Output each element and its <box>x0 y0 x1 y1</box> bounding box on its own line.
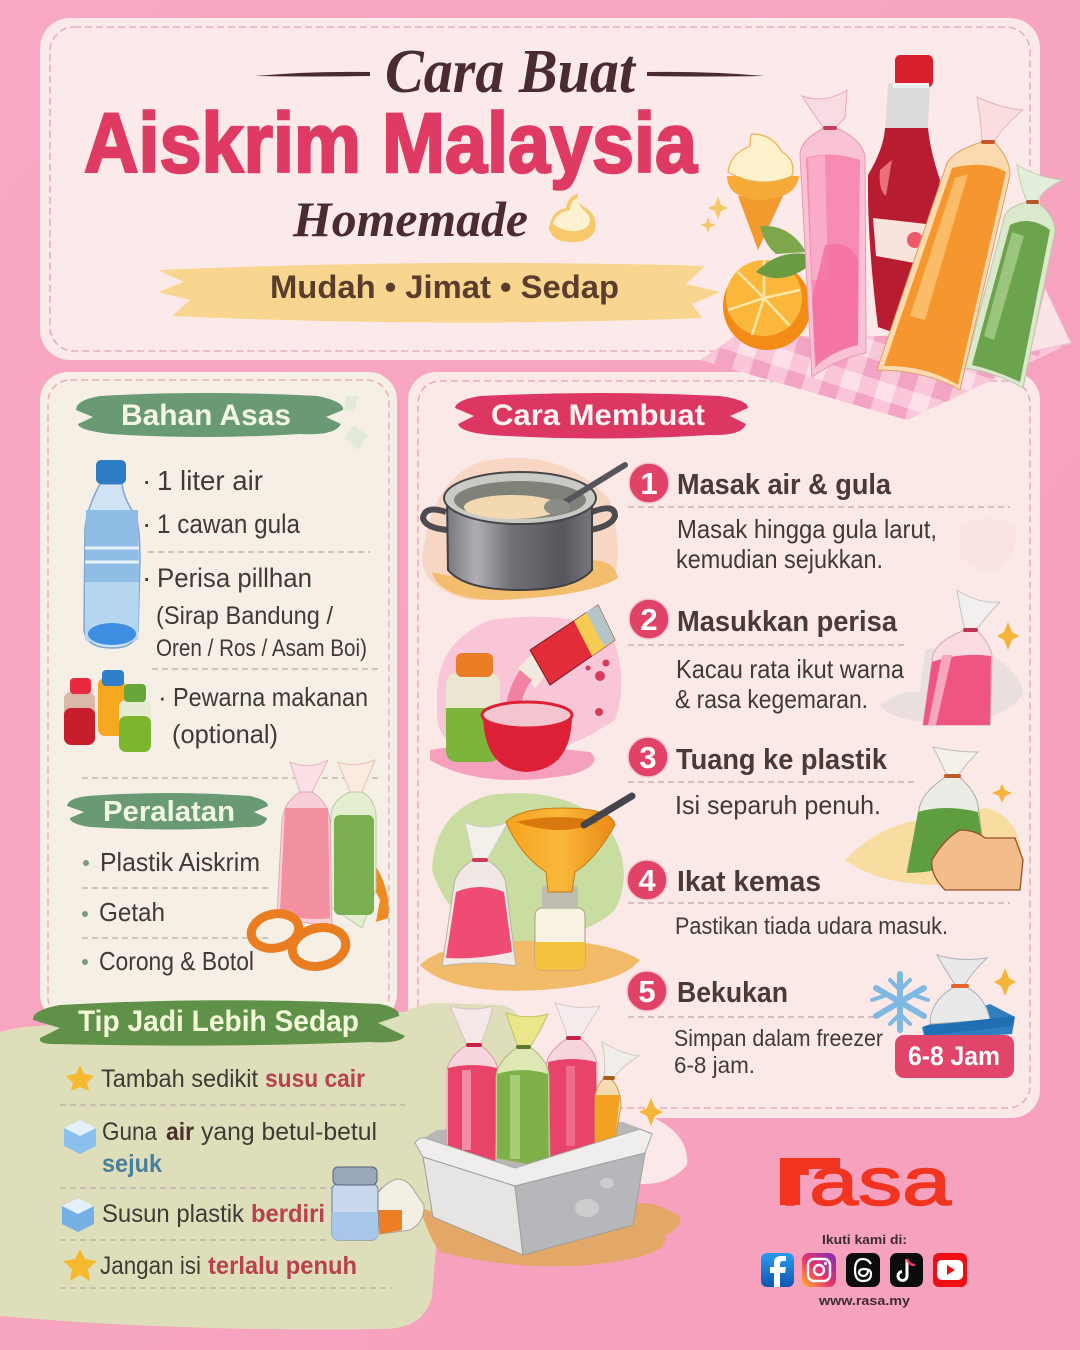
list: bahan asas ingredients: Perisa pillhan <box>157 563 312 593</box>
illustration: tray of ice pops <box>415 1003 687 1266</box>
icon: threads <box>846 1253 880 1287</box>
orange bag <box>877 97 1023 390</box>
illustration: bag funnel bottle <box>420 793 640 991</box>
icon: instagram <box>802 1253 836 1287</box>
step 1: Masak air & gula <box>677 469 892 501</box>
orange bag <box>595 1042 639 1146</box>
list: peralatan: Getah <box>99 897 165 927</box>
pink bag 2 <box>546 1003 600 1160</box>
title: cara buat: Cara Buat <box>385 38 637 106</box>
icon: food colouring bottles <box>64 670 151 752</box>
list: bahan asas ingredients: (optional) <box>172 719 278 749</box>
illustration: cooking pot <box>422 458 625 600</box>
icon: water bottle <box>84 460 140 648</box>
logo: rasa: rasa <box>780 1144 951 1220</box>
step 5: 5 <box>638 974 656 1009</box>
cloth flap <box>1030 288 1071 352</box>
icon: sparkles <box>700 197 728 233</box>
heading: cara membuat: Cara Membuat <box>491 399 705 432</box>
icon: youtube <box>933 1253 967 1287</box>
text: follow us: Ikuti kami di: <box>822 1232 907 1247</box>
ice cream cone <box>727 134 799 250</box>
step 5 <box>627 971 883 1078</box>
tip 2: sejuk <box>102 1150 162 1178</box>
tablecloth <box>700 336 1071 420</box>
tip 3 <box>60 1198 330 1240</box>
icon: facebook <box>761 1253 794 1287</box>
green bag <box>496 1013 550 1168</box>
list: bahan asas ingredients: · <box>142 465 151 496</box>
banner: mudah jimat sedap: Mudah • Jimat • Sedap <box>270 269 619 305</box>
tip 3: berdiri <box>251 1200 325 1228</box>
orange fruit <box>723 226 811 350</box>
step 3: 3 <box>639 740 657 775</box>
list: bahan asas ingredients: · <box>142 508 151 539</box>
list: bahan asas ingredients: · <box>142 562 151 593</box>
list: bahan asas ingredients: · <box>158 682 167 712</box>
step 3 <box>628 737 915 820</box>
step 5: Bekukan <box>677 977 788 1009</box>
step 4: Pastikan tiada udara masuk. <box>675 913 948 940</box>
step 1: kemudian sejukkan. <box>676 544 883 574</box>
pink bag 1 <box>447 1006 498 1165</box>
tip 1: Tambah sedikit <box>101 1065 258 1093</box>
panel: tips <box>0 1003 521 1329</box>
illustration: hero ice pops <box>700 55 1071 420</box>
tip 2: yang betul-betul <box>201 1118 377 1146</box>
list: bahan asas ingredients: (Sirap Bandung / <box>156 602 333 630</box>
heading: bahan asas <box>76 393 343 437</box>
panel: header <box>40 18 1040 360</box>
tip 2: Guna <box>102 1118 157 1146</box>
step 2 <box>628 599 905 714</box>
step 3: Tuang ke plastik <box>676 744 888 776</box>
title: aiskrim malaysia: Aiskrim Malaysia <box>84 96 698 190</box>
step 1: 1 <box>640 466 658 501</box>
list: peralatan: Plastik Aiskrim <box>100 847 260 877</box>
tip 1 <box>60 1065 405 1105</box>
illustration: pouring flavour <box>430 605 621 780</box>
tip 4: terlalu penuh <box>208 1252 357 1280</box>
title: homemade: Homemade <box>292 191 528 247</box>
step 1: Masak hingga gula larut, <box>677 514 937 544</box>
tip 4: Jangan isi <box>100 1252 201 1280</box>
list: bahan asas ingredients <box>82 465 380 778</box>
list: bahan asas ingredients: Oren / Ros / Asam Boi) <box>156 635 367 662</box>
step 2: & rasa kegemaran. <box>675 684 868 714</box>
tip 1: susu cair <box>265 1065 365 1093</box>
tip 3: Susun plastik <box>102 1200 244 1228</box>
list: bahan asas ingredients: 1 liter air <box>157 465 263 496</box>
heading: bahan asas: Bahan Asas <box>121 399 291 432</box>
icon: tiktok <box>890 1253 923 1287</box>
green bag <box>965 165 1062 388</box>
text: website: www.rasa.my <box>818 1293 911 1308</box>
list: bahan asas ingredients: 1 cawan gula <box>157 509 301 539</box>
heading: tip jadi lebih sedap: Tip Jadi Lebih Sedap <box>78 1005 359 1038</box>
illustration: hand and bag <box>845 747 1023 890</box>
tip 2 <box>60 1118 405 1188</box>
icon: shaker and cup <box>332 1167 424 1240</box>
illustration: plastic bags and rubber bands <box>248 760 389 971</box>
step 4: Ikat kemas <box>677 866 821 898</box>
icon: small ice cream <box>549 194 596 242</box>
heading: cara membuat <box>455 393 748 438</box>
pink bag <box>800 90 866 377</box>
list: bahan asas ingredients: Pewarna makanan <box>173 682 368 712</box>
heading: peralatan <box>67 793 268 830</box>
step 2: 2 <box>640 602 658 637</box>
title: cara buat <box>255 38 765 106</box>
tip 4 <box>60 1249 392 1288</box>
badge: 6-8 jam <box>895 1035 1014 1078</box>
tray rim front <box>415 1129 652 1186</box>
step 1 <box>628 463 1016 574</box>
heading: tip jadi lebih sedap <box>33 1000 405 1046</box>
tray left wall <box>423 1157 523 1255</box>
syrup bottle <box>868 55 940 340</box>
panel: cara membuat <box>408 372 1040 1118</box>
panel: bahan asas <box>40 372 397 1022</box>
tray right wall <box>515 1153 645 1255</box>
list: peralatan <box>82 847 272 976</box>
tray shadow <box>420 1203 681 1266</box>
step 4 <box>627 860 1010 940</box>
step 3: Isi separuh penuh. <box>675 790 881 820</box>
banner: mudah jimat sedap <box>158 263 720 323</box>
list: peralatan: Corong & Botol <box>99 946 254 976</box>
illustration: pink bag step 2 <box>880 590 1022 725</box>
tip 2: air <box>166 1118 194 1146</box>
tray inside <box>415 1122 652 1180</box>
illustration: freezer tray <box>872 955 1016 1040</box>
heading: peralatan: Peralatan <box>103 796 235 828</box>
step 5: Simpan dalam freezer <box>674 1025 883 1051</box>
pale blob <box>590 1110 687 1184</box>
step 5: 6-8 jam. <box>674 1052 755 1078</box>
badge: 6-8 jam: 6-8 Jam <box>908 1041 1000 1071</box>
step 4: 4 <box>638 863 656 898</box>
step 2: Masukkan perisa <box>677 606 898 638</box>
step 2: Kacau rata ikut warna <box>676 654 904 684</box>
